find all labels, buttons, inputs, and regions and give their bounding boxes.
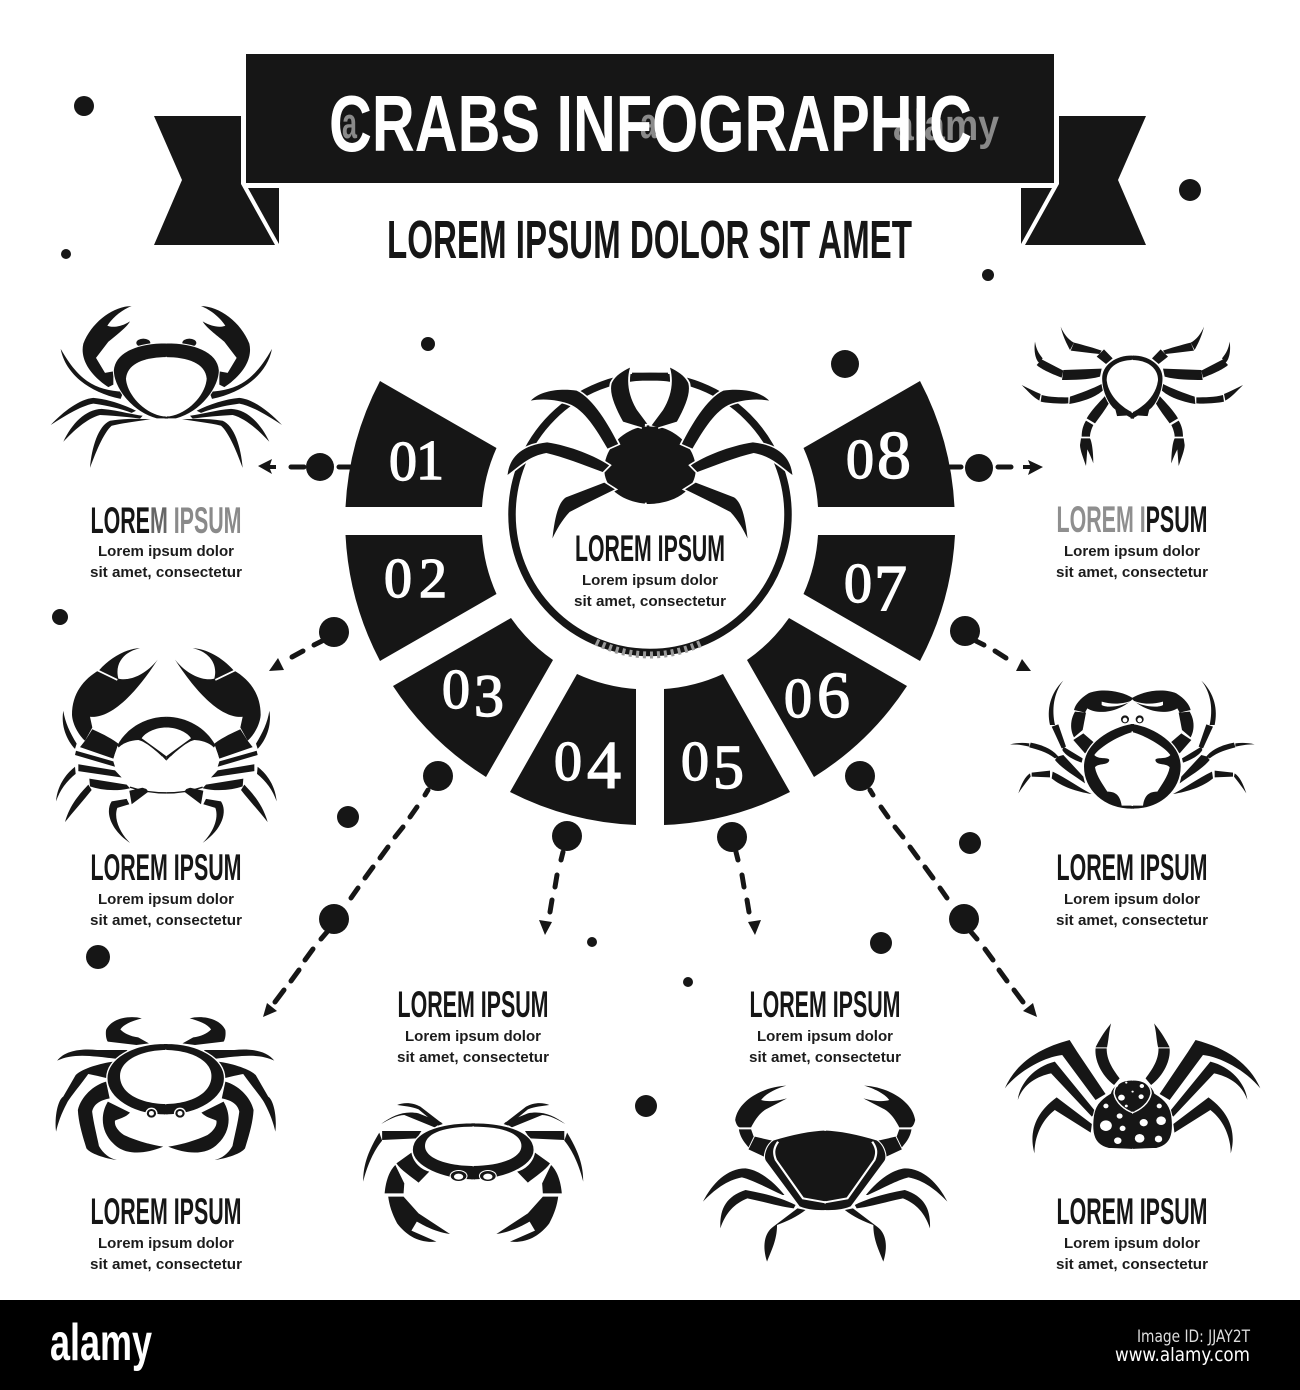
text: label 03: Lorem ipsum dolor — [98, 1235, 234, 1252]
arrow 05 — [717, 822, 761, 935]
segment 03: 0 — [442, 659, 470, 721]
icon: crab 05 — [703, 1086, 947, 1262]
segment 07: 7 — [874, 552, 907, 625]
arrow 06 — [845, 761, 1037, 1017]
segment 05: 0 — [681, 731, 709, 793]
icon: crab 07 — [1010, 681, 1255, 809]
icon: crab 02 — [56, 648, 277, 843]
icon: crab 04 — [363, 1103, 583, 1242]
arrow 07 — [950, 616, 1031, 671]
text: label 05: Lorem ipsum dolor — [757, 1028, 893, 1045]
icon: crab 03 — [56, 1017, 276, 1160]
text: label 06: sit amet, consectetur — [1056, 1256, 1208, 1273]
segment 01 — [346, 381, 496, 507]
text: label 06: Lorem ipsum dolor — [1064, 1235, 1200, 1252]
segment 03: 3 — [474, 663, 504, 729]
arrow 08 — [950, 454, 1043, 482]
text: label 05: LOREM IPSUM — [750, 984, 900, 1025]
segment 08: 0 — [846, 429, 874, 491]
text: central label: Lorem ipsum dolor — [582, 572, 718, 589]
text: label 02: LOREM IPSUM — [90, 847, 242, 888]
text: label 01: LOREM IPSUM — [90, 500, 242, 541]
subtitle: LOREM IPSUM DOLOR SIT AMET — [387, 210, 912, 270]
footer logo: alamy — [50, 1314, 152, 1372]
text: label 05 — [749, 984, 901, 1066]
arrow 02 — [269, 617, 349, 671]
text: central label — [574, 528, 726, 610]
text: label 05: sit amet, consectetur — [749, 1049, 901, 1066]
segment 07 — [804, 535, 955, 661]
segment 06 — [747, 618, 907, 777]
segment 08 — [804, 381, 954, 507]
segment 05 — [664, 674, 790, 825]
arrow 01 — [258, 453, 350, 481]
text: label 08: Lorem ipsum dolor — [1064, 543, 1200, 560]
text: label 02 — [90, 847, 242, 929]
segment 06: 6 — [817, 659, 850, 732]
segment 04: 0 — [554, 731, 582, 793]
text: central label: sit amet, consectetur — [574, 593, 726, 610]
text: label 01: sit amet, consectetur — [90, 564, 242, 581]
text: label 06 — [1056, 1191, 1208, 1273]
text: central label: LOREM IPSUM — [575, 528, 725, 569]
text: label 02: sit amet, consectetur — [90, 912, 242, 929]
icon: crab 06 — [1005, 1023, 1260, 1153]
footer url: www.alamy.com — [1115, 1344, 1250, 1366]
text: label 03: LOREM IPSUM — [90, 1191, 242, 1232]
dashed connectors with arrows — [258, 453, 1043, 1017]
title: CRABS INFOGRAPHIC — [329, 79, 972, 168]
text: label 07: sit amet, consectetur — [1056, 912, 1208, 929]
text: label 04 — [397, 984, 549, 1066]
text: label 08: sit amet, consectetur — [1056, 564, 1208, 581]
text: label 03: sit amet, consectetur — [90, 1256, 242, 1273]
text: label 08 — [1056, 499, 1208, 581]
icon: central king crab — [508, 368, 792, 538]
segment 02: 0 — [384, 548, 412, 610]
segment 02: 2 — [419, 548, 447, 610]
segment 08: 8 — [877, 417, 911, 493]
text: label 04: Lorem ipsum dolor — [405, 1028, 541, 1045]
text: label 04: sit amet, consectetur — [397, 1049, 549, 1066]
footer image id: Image ID: JJAY2T — [1137, 1327, 1250, 1347]
segment 05: 5 — [713, 734, 744, 802]
segment 07: 0 — [844, 553, 872, 615]
banner: a — [342, 99, 357, 148]
text: label 07 — [1056, 847, 1208, 929]
text: label 01 — [90, 500, 242, 581]
text: label 02: Lorem ipsum dolor — [98, 891, 234, 908]
segment 01: 0 — [389, 431, 417, 493]
arrow 04 — [539, 821, 582, 935]
text: label 03 — [90, 1191, 242, 1273]
banner: alamy — [893, 101, 999, 150]
segment 06: 0 — [784, 668, 812, 730]
segment 02 — [346, 535, 496, 661]
segment 03 — [393, 618, 553, 777]
text: label 01: Lorem ipsum dolor — [98, 543, 234, 560]
segment 04: 4 — [587, 727, 621, 803]
segment 04 — [510, 674, 636, 825]
segment 01: 1 — [416, 430, 444, 492]
background dots — [52, 96, 1201, 1117]
text: label 07: Lorem ipsum dolor — [1064, 891, 1200, 908]
segmented wheel — [346, 381, 955, 825]
banner: a — [640, 99, 657, 148]
text: label 04: LOREM IPSUM — [398, 984, 548, 1025]
arrow 03 — [263, 761, 453, 1017]
central ring — [512, 376, 788, 655]
text: label 08: LOREM IPSUM — [1056, 499, 1208, 540]
banner — [154, 54, 1146, 245]
footer bar — [0, 1300, 1300, 1390]
icon: crab 01 — [51, 306, 282, 468]
icon: crab 08 — [1022, 327, 1243, 466]
